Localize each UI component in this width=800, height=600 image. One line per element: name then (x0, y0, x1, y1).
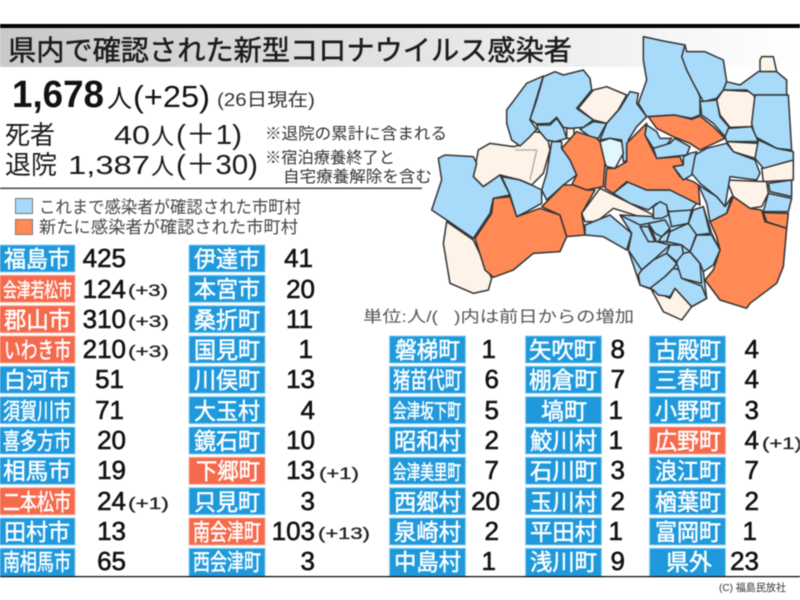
row 喜多方市: 喜多方市 (3, 428, 71, 454)
row 会津若松市: 124 (83, 274, 126, 304)
row 川俣町: 13 (286, 364, 315, 394)
row 喜多方市 (0, 425, 126, 455)
total cases: 人 (107, 85, 132, 113)
row 須賀川市 (0, 395, 124, 425)
row 広野町: 4 (745, 425, 759, 455)
row 浅川町 (526, 546, 625, 576)
row 広野町: (+1) (762, 434, 800, 453)
row 南相馬市: 南相馬市 (3, 549, 71, 575)
row 只見町: 3 (301, 486, 315, 516)
row 楢葉町 (650, 486, 759, 516)
row 三春町: 4 (745, 364, 759, 394)
row 伊達市 (189, 243, 313, 273)
row 大玉村 (189, 395, 315, 425)
row 浪江町 (650, 455, 759, 485)
row 平田村: 平田村 (530, 519, 597, 545)
row 古殿町: 4 (745, 334, 759, 364)
discharged: 1,387 (68, 150, 150, 180)
row 二本松市: 24 (97, 486, 126, 516)
legend: これまで感染者が確認された市町村 (39, 198, 301, 217)
row 西会津町: 西会津町 (193, 549, 261, 575)
deaths: 死者 (5, 120, 55, 150)
discharged: (＋30) (176, 149, 258, 180)
row 田村市: 田村市 (4, 519, 70, 545)
row 塙町: 塙町 (541, 398, 587, 424)
row 相馬市: 相馬市 (3, 458, 71, 484)
row 西郷村 (390, 486, 500, 516)
row 会津美里町: 7 (485, 455, 499, 485)
row 会津坂下町: 5 (485, 395, 499, 425)
unit note: 単位:人/( )内は前日からの増加 (363, 308, 634, 326)
row 桑折町: 桑折町 (194, 307, 260, 333)
discharged (5, 149, 258, 180)
row 猪苗代町: 6 (485, 364, 499, 394)
row 二本松市: (+1) (128, 494, 169, 513)
deaths: 人 (151, 123, 174, 149)
row 西郷村: 20 (471, 486, 500, 516)
row 玉川村: 玉川村 (530, 489, 597, 515)
row 玉川村 (526, 486, 625, 516)
row 会津若松市: 会津若松市 (3, 279, 72, 302)
row 白河市 (0, 364, 124, 394)
row 昭和村: 2 (485, 425, 499, 455)
title: 県内で確認された新型コロナウイルス感染者 (8, 35, 572, 66)
row 矢吹町: 矢吹町 (529, 337, 596, 363)
row 福島市 (0, 243, 126, 273)
row 西会津町: 3 (301, 546, 315, 576)
row 浅川町: 浅川町 (530, 549, 597, 575)
row 磐梯町 (390, 334, 496, 364)
row 南会津町: (+13) (318, 524, 370, 543)
row 国見町 (189, 334, 313, 364)
row 相馬市 (0, 455, 126, 485)
row 矢吹町: 8 (611, 334, 625, 364)
row 下郷町: (+1) (319, 464, 359, 483)
row 猪苗代町: 猪苗代町 (393, 367, 462, 393)
row 郡山市 (0, 304, 169, 334)
row 三春町 (650, 364, 759, 394)
notes: ※宿泊療養終了と (265, 149, 395, 167)
table column 4 (526, 334, 625, 576)
row 昭和村: 昭和村 (394, 428, 461, 454)
row 南会津町 (189, 516, 370, 546)
row 棚倉町: 棚倉町 (529, 367, 597, 393)
row 鮫川村: 1 (609, 425, 623, 455)
row 富岡町 (650, 516, 757, 546)
row 須賀川市: 71 (95, 395, 124, 425)
row 磐梯町: 1 (482, 334, 496, 364)
notes: 自宅療養解除を含む (283, 168, 432, 186)
row 鏡石町: 10 (286, 425, 315, 455)
row 南相馬市 (0, 546, 126, 576)
row 白河市: 51 (95, 364, 124, 394)
row 会津若松市: (+3) (128, 281, 168, 300)
row 二本松市 (0, 486, 169, 516)
row 二本松市: 二本松市 (3, 489, 71, 515)
deaths: (＋1) (176, 119, 242, 150)
row 富岡町: 1 (743, 516, 757, 546)
row 本宮市 (189, 274, 315, 304)
row 大玉村: 大玉村 (194, 398, 260, 424)
row 石川町: 3 (611, 455, 625, 485)
row 棚倉町: 7 (611, 364, 625, 394)
deaths: 40 (114, 120, 150, 150)
row 三春町: 三春町 (655, 367, 721, 393)
row 小野町: 3 (745, 395, 759, 425)
row 田村市 (0, 516, 126, 546)
row 県外: 県外 (666, 549, 712, 575)
row 泉崎村: 泉崎村 (394, 519, 461, 545)
table column 5 (650, 334, 800, 576)
total cases: (26日現在) (217, 90, 315, 110)
deaths (5, 119, 242, 150)
row いわき市: (+3) (128, 342, 169, 361)
row 玉川村: 2 (611, 486, 625, 516)
map of municipalities (432, 37, 793, 320)
row 只見町: 只見町 (194, 489, 260, 515)
notes: ※退院の累計に含まれる (265, 125, 447, 143)
row 下郷町 (189, 455, 359, 485)
row いわき市: いわき市 (4, 337, 71, 363)
row 鮫川村: 鮫川村 (530, 428, 597, 454)
row 白河市: 白河市 (4, 367, 70, 393)
row 矢吹町 (526, 334, 625, 364)
row 鏡石町 (189, 425, 315, 455)
row 只見町 (189, 486, 315, 516)
row 川俣町 (189, 364, 315, 394)
row 会津美里町: 会津美里町 (393, 461, 461, 484)
row 国見町: 1 (299, 334, 313, 364)
row 下郷町: 下郷町 (196, 458, 260, 484)
row 平田村 (526, 516, 623, 546)
legend: 新たに感染者が確認された市町村 (39, 218, 298, 237)
row 県外: 23 (730, 546, 759, 576)
row 西会津町 (189, 546, 315, 576)
row 会津美里町 (390, 455, 499, 485)
row 国見町: 国見町 (194, 337, 260, 363)
row 楢葉町: 2 (745, 486, 759, 516)
discharged: 退院 (5, 150, 57, 180)
row 石川町 (526, 455, 625, 485)
row 泉崎村 (390, 516, 499, 546)
row 本宮市: 20 (286, 274, 315, 304)
row 喜多方市: 20 (97, 425, 126, 455)
row 川俣町: 川俣町 (194, 367, 260, 393)
row 中島村 (390, 546, 496, 576)
row 塙町: 1 (609, 395, 623, 425)
top rule (0, 24, 800, 28)
row 浅川町: 9 (611, 546, 625, 576)
row 広野町 (650, 425, 800, 455)
table column 1 (0, 243, 169, 576)
row 県外 (650, 546, 759, 576)
row 本宮市: 本宮市 (194, 276, 260, 302)
row 広野町: 広野町 (655, 428, 721, 454)
row 伊達市: 41 (284, 243, 313, 273)
total cases: 1,678 (12, 74, 104, 116)
row いわき市 (0, 334, 169, 364)
row 南会津町: 103 (272, 516, 315, 546)
row 浪江町: 7 (745, 455, 759, 485)
row 西郷村: 西郷村 (394, 489, 461, 515)
row 会津若松市 (0, 274, 168, 304)
row 郡山市: 310 (83, 304, 126, 334)
row 富岡町: 富岡町 (655, 519, 721, 545)
credit: (C) 福島民放社 (719, 581, 786, 594)
legend (16, 198, 301, 237)
row 福島市: 425 (83, 243, 126, 273)
row 古殿町: 古殿町 (655, 337, 721, 363)
row 郡山市: (+3) (128, 312, 169, 331)
row 桑折町: 11 (286, 304, 313, 334)
row 福島市: 福島市 (4, 246, 70, 272)
row 楢葉町: 楢葉町 (655, 489, 721, 515)
row 田村市: 13 (97, 516, 126, 546)
row 郡山市: 郡山市 (4, 307, 71, 333)
row 大玉村: 4 (301, 395, 315, 425)
row 磐梯町: 磐梯町 (395, 337, 460, 363)
row 小野町: 小野町 (655, 398, 721, 424)
row 下郷町: 13 (286, 455, 315, 485)
total cases (12, 74, 315, 116)
row 桑折町 (189, 304, 313, 334)
row 古殿町 (650, 334, 759, 364)
title band (0, 28, 800, 67)
row 南会津町: 南会津町 (193, 519, 261, 545)
row 会津坂下町: 会津坂下町 (393, 400, 461, 423)
row 浪江町: 浪江町 (655, 458, 721, 484)
row 鏡石町: 鏡石町 (194, 428, 260, 454)
table column 2 (189, 243, 370, 576)
bottom rule (0, 576, 800, 577)
discharged: 人 (151, 153, 174, 179)
table column 3 (390, 334, 500, 576)
row 須賀川市: 須賀川市 (3, 398, 71, 424)
notes (265, 125, 447, 186)
row いわき市: 210 (83, 334, 126, 364)
row 会津坂下町 (390, 395, 499, 425)
row 昭和村 (390, 425, 499, 455)
row 伊達市: 伊達市 (194, 246, 260, 272)
row 中島村: 1 (482, 546, 496, 576)
row 塙町 (526, 395, 623, 425)
row 泉崎村: 2 (485, 516, 499, 546)
row 相馬市: 19 (97, 455, 126, 485)
row 平田村: 1 (609, 516, 623, 546)
row 石川町: 石川町 (530, 458, 597, 484)
total cases: (+25) (133, 79, 210, 114)
row 南相馬市: 65 (97, 546, 126, 576)
row 棚倉町 (526, 364, 625, 394)
row 中島村: 中島村 (394, 549, 461, 575)
row 小野町 (650, 395, 759, 425)
row 鮫川村 (526, 425, 623, 455)
